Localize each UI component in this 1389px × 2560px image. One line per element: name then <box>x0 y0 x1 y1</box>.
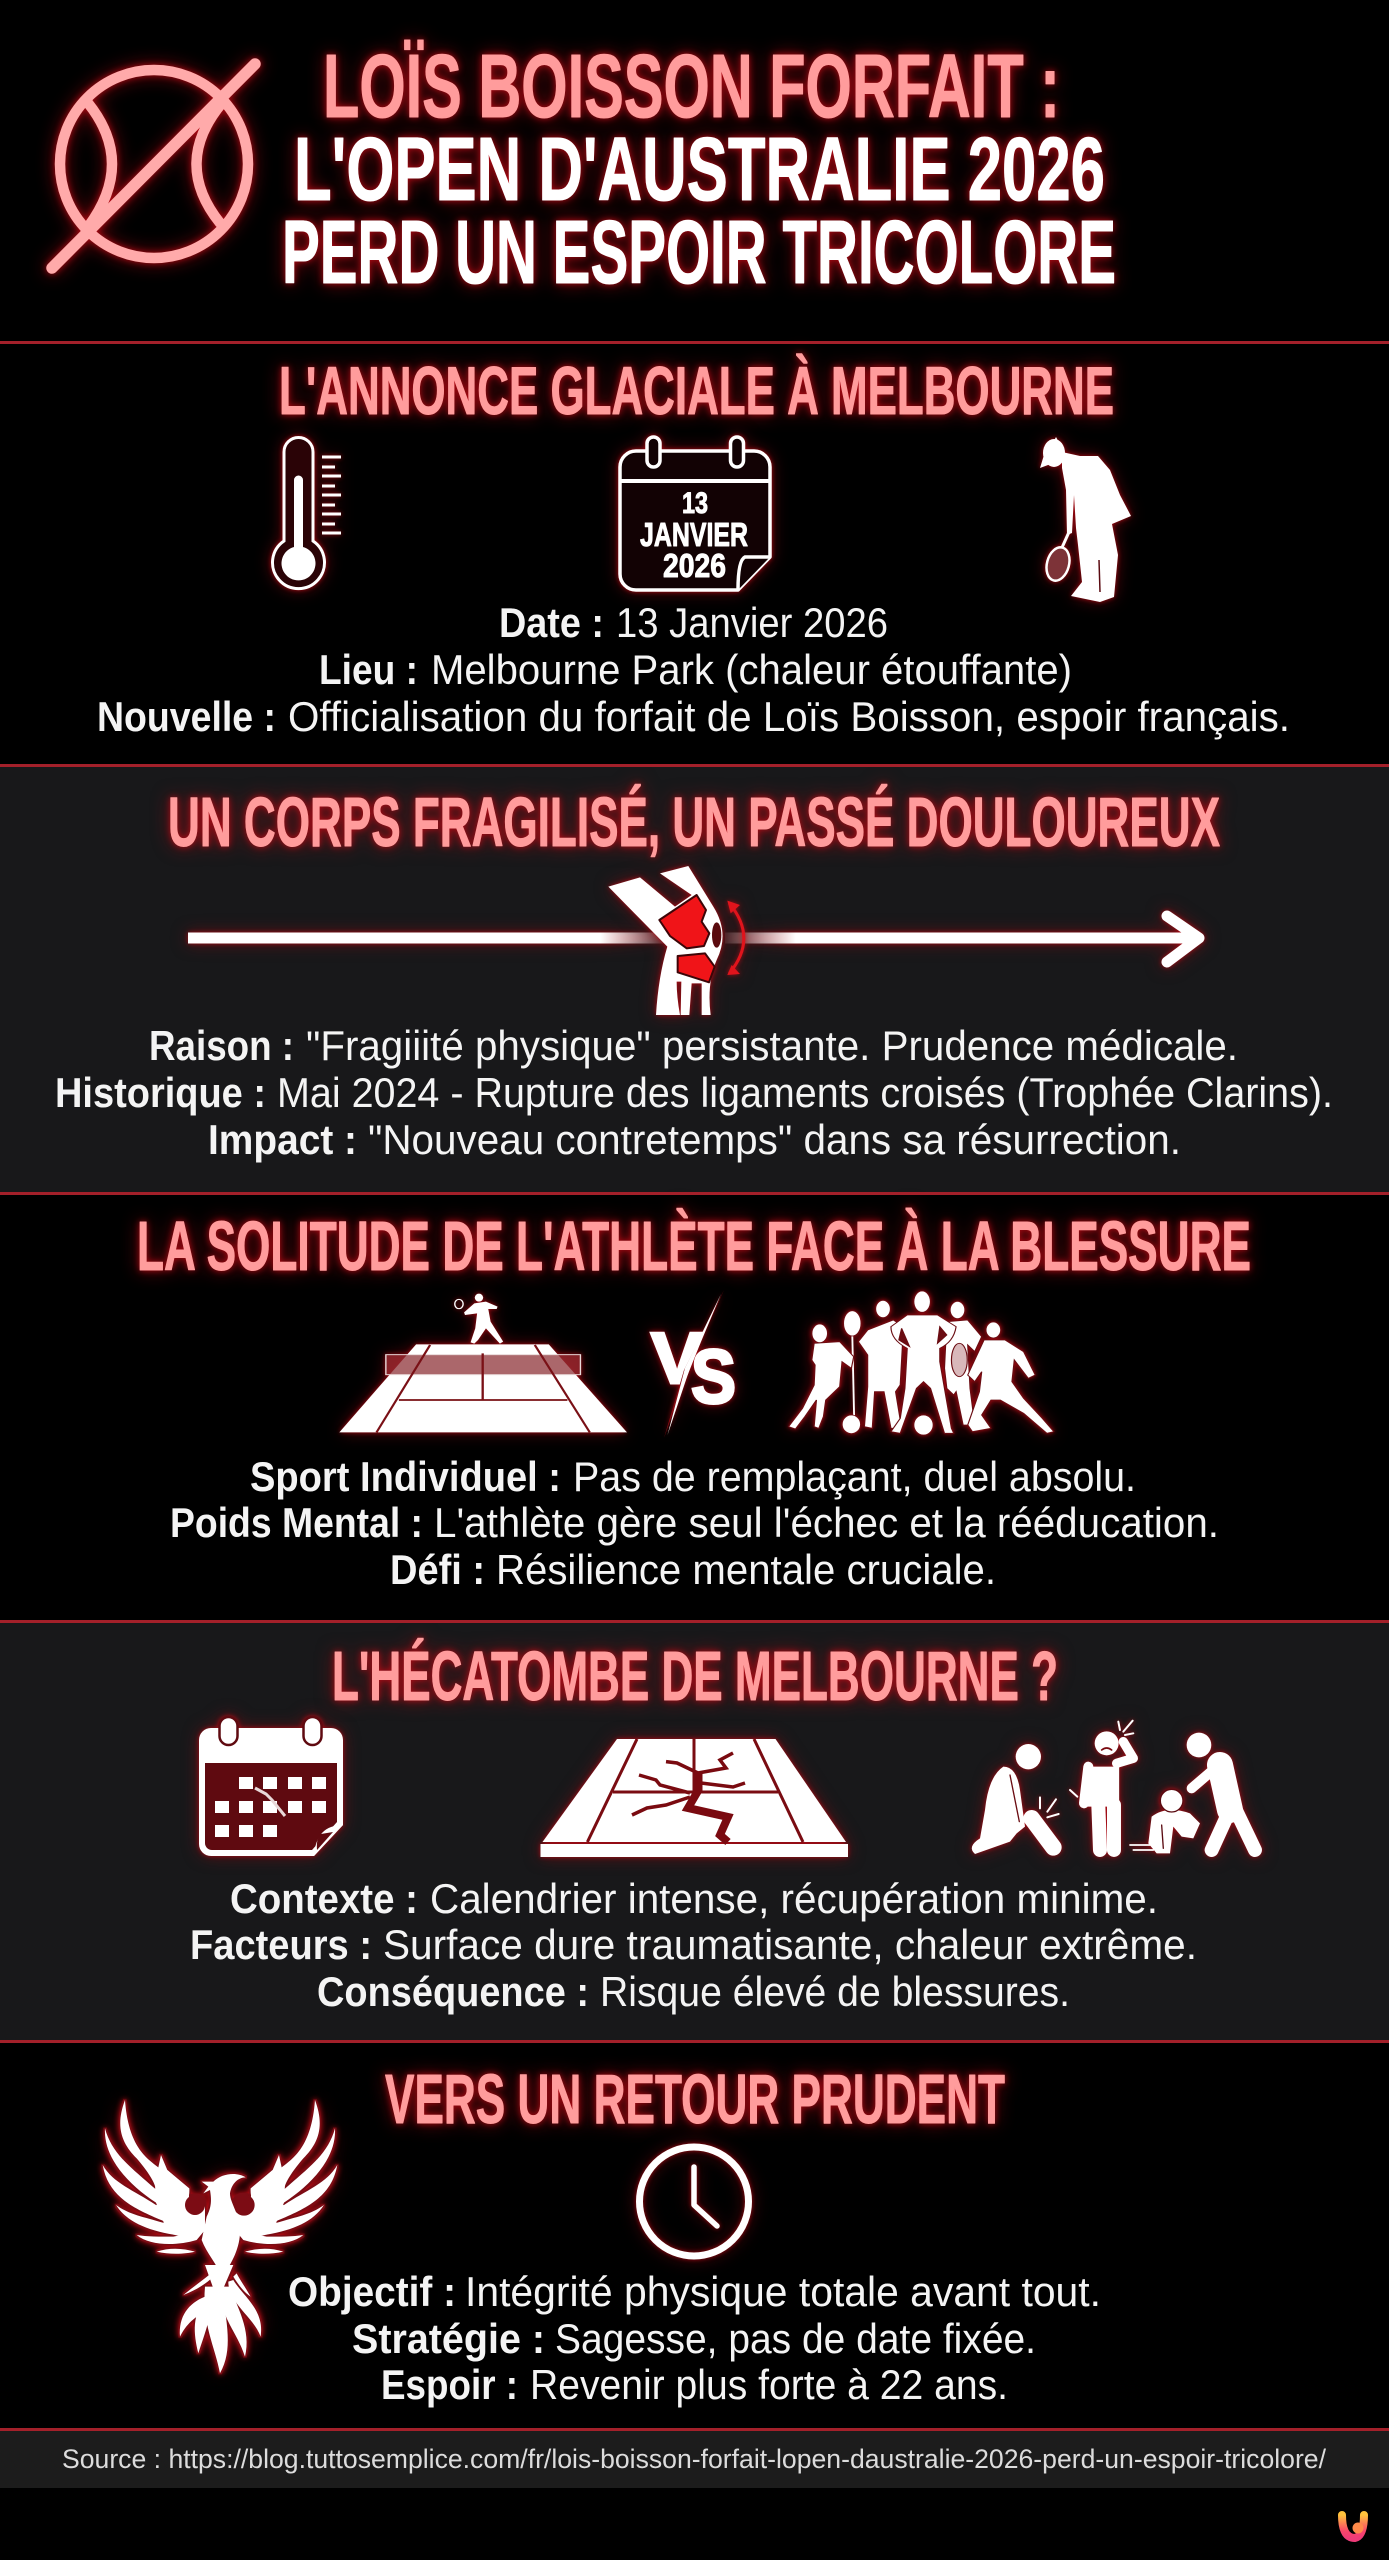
text block: retour details <box>288 2268 1101 2408</box>
text block: retour details: Stratégie : <box>352 2315 545 2362</box>
icon: bowed tennis player <box>1040 437 1131 602</box>
text block: hécatombe details: Contexte : <box>230 1875 418 1922</box>
icon: lone player on court <box>339 1294 627 1432</box>
icon: clock <box>640 2147 748 2256</box>
text block: corps details <box>55 1022 1333 1163</box>
icon: calendar 13 janvier 2026: 13 <box>682 487 708 520</box>
text block: hécatombe details: Risque élevé de blessures. <box>600 1968 1070 2015</box>
icon: phoenix <box>103 2100 337 2373</box>
text block: retour details: Objectif : <box>288 2268 456 2315</box>
logo <box>1342 2515 1364 2538</box>
text block: solitude details: Défi : <box>390 1546 485 1593</box>
text block: retour details: Sagesse, pas de date fixée. <box>555 2315 1036 2362</box>
icon: calendar 13 janvier 2026 <box>620 437 770 590</box>
footer: source <box>0 2429 1389 2488</box>
icon: injured athletes <box>972 1721 1255 1854</box>
icon: injured knee <box>608 866 744 1015</box>
icon: packed calendar <box>199 1717 343 1856</box>
icon: cracked court <box>540 1739 848 1857</box>
icon: calendar 13 janvier 2026: JANVIER <box>640 516 748 553</box>
icon: team of athletes <box>789 1291 1054 1435</box>
panel: l'annonce glaciale <box>0 342 1389 765</box>
text block: corps details: "Nouveau contretemps" dans sa résurrection. <box>368 1116 1181 1163</box>
text block: hécatombe details: Calendrier intense, récupération minime. <box>430 1875 1158 1922</box>
text block: solitude details: Poids Mental : <box>170 1499 423 1546</box>
text block: annonce details: Nouvelle : <box>97 693 276 740</box>
panel: la solitude de l'athlète <box>0 1193 1389 1620</box>
title <box>282 37 1116 303</box>
text block: solitude details: Sport Individuel : <box>250 1453 561 1500</box>
text block: solitude details: Pas de remplaçant, duel absolu. <box>573 1453 1136 1500</box>
panel: un corps fragilisé <box>0 765 1389 1193</box>
panel: header <box>0 0 1389 342</box>
text block: retour details: Espoir : <box>381 2361 518 2408</box>
text block: annonce details: Lieu : <box>319 646 418 693</box>
text block: solitude details <box>170 1453 1219 1593</box>
icon: versus: S <box>691 1335 736 1420</box>
text block: corps details: Impact : <box>208 1116 357 1163</box>
text block: solitude details: Résilience mentale cruciale. <box>496 1546 996 1593</box>
icon: calendar 13 janvier 2026: 2026 <box>663 547 726 584</box>
icon: versus <box>651 1290 736 1438</box>
icon: crossed-out tennis ball <box>52 64 255 268</box>
arrow: timeline <box>188 916 1199 962</box>
footer: source: Source : https://blog.tuttosemplice.com/fr/lois-boisson-forfait-lopen-daustralie-2026-perd-un-espoir-tricolore/ <box>62 2444 1326 2474</box>
text block: corps details: Raison : <box>149 1022 294 1069</box>
text block: retour details: Intégrité physique totale avant tout. <box>465 2268 1101 2315</box>
text block: hécatombe details: Conséquence : <box>317 1968 589 2015</box>
text block: annonce details: Officialisation du forfait de Loïs Boisson, espoir français. <box>288 693 1290 740</box>
panel: vers un retour prudent <box>0 2041 1389 2429</box>
text block: corps details: "Fragiiité physique" persistante. Prudence médicale. <box>306 1022 1238 1069</box>
text block: hécatombe details: Facteurs : <box>190 1921 372 1968</box>
text block: annonce details: Melbourne Park (chaleur étouffante) <box>431 646 1072 693</box>
heading: retour prudent: VERS UN RETOUR PRUDENT <box>385 2060 1005 2138</box>
icon: thermometer <box>273 438 341 589</box>
text block: annonce details: 13 Janvier 2026 <box>616 599 888 646</box>
text block: retour details: Revenir plus forte à 22 ans. <box>530 2361 1008 2408</box>
panel: l'hécatombe de melbourne <box>0 1620 1389 2041</box>
text block: corps details: Historique : <box>55 1069 266 1116</box>
text block: annonce details <box>97 599 1290 740</box>
text block: hécatombe details <box>190 1875 1197 2015</box>
text block: hécatombe details: Surface dure traumatisante, chaleur extrême. <box>383 1921 1197 1968</box>
text block: annonce details: Date : <box>499 599 604 646</box>
text block: corps details: Mai 2024 - Rupture des ligaments croisés (Trophée Clarins). <box>277 1069 1333 1116</box>
icon: versus: V <box>651 1319 703 1399</box>
text block: solitude details: L'athlète gère seul l'échec et la rééducation. <box>434 1499 1219 1546</box>
